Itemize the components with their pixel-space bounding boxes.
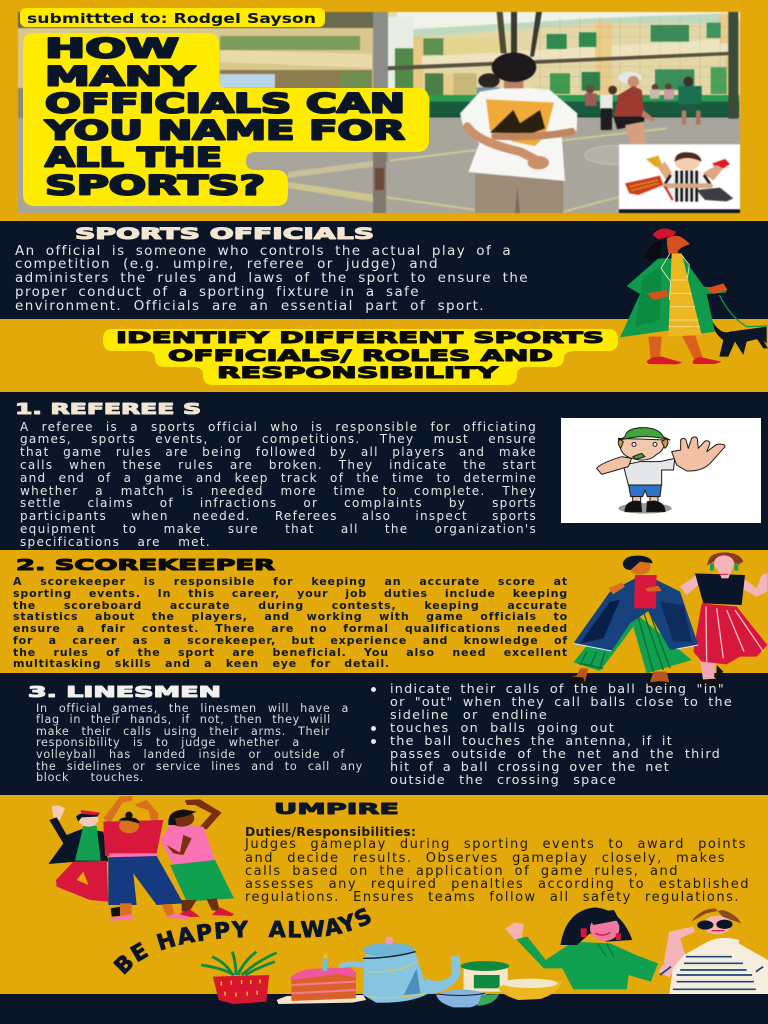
plant [201, 952, 277, 1004]
heading: linesmen: 3. LINESMEN [28, 683, 221, 701]
text: scorekeeper description [13, 575, 568, 670]
text: sports officials definition: environment. Officials are an essential part of sport. [15, 298, 485, 314]
main title: HOW [45, 34, 179, 64]
list: linesmen duties: hit of a ball crossing over the net [390, 760, 670, 775]
text: linesmen description: volleyball has landed inside or outside of [36, 748, 345, 761]
text: sports officials definition: administers the rules and laws of the sport to ensure the [15, 270, 529, 286]
text: sports officials definition: proper conduct of a sporting fixture in a safe [15, 284, 420, 300]
teapot [337, 937, 461, 1003]
panel: bottom band [0, 994, 768, 1024]
main title: OFFICIALS CAN [45, 88, 405, 120]
text: referee description: games, sports events, or competitions. They must ensure [20, 432, 537, 446]
text: linesmen description [36, 702, 363, 784]
list: linesmen duties [371, 682, 733, 788]
heading: referees: 1. REFEREE S [15, 400, 201, 418]
text: umpire duties [244, 825, 750, 905]
bowl [498, 979, 562, 1000]
text: scorekeeper description: statistics about the players, and working with game officials to [13, 610, 568, 623]
text: umpire duties: and decide results. Observes gameplay closely, makes [245, 851, 726, 866]
list: linesmen duties: outside the crossing space [390, 773, 617, 788]
text: referee description: participants when needed. Referees also inspect sports [20, 509, 537, 523]
jar [461, 961, 509, 992]
text: scorekeeper description: the scoreboard accurate during contests, keeping accurate [13, 599, 568, 612]
main title [23, 33, 429, 206]
text: umpire duties: regulations. Ensures teams follow all safety regulations. [245, 890, 740, 905]
list: linesmen duties: passes outside of the net and the third [390, 747, 721, 762]
hero photo of volleyball court [17, 11, 741, 214]
text: referee description: and end of a game and keep track of the time to determine [20, 471, 537, 485]
background people [477, 72, 702, 144]
image: referee blowing whistle [561, 418, 761, 523]
main title: SPORTS? [45, 170, 265, 202]
illustration: two fashion figures [570, 552, 768, 685]
text: referee description: specifications are met. [20, 535, 211, 549]
illustration: table with plant, cake, teapot, bowls [200, 936, 562, 1008]
text: referee description: equipment to make sure that all the organization's [20, 522, 537, 536]
illustration: woman walking dog [620, 228, 768, 364]
text: linesmen description: In official games, the linesmen will have a [36, 702, 349, 715]
submitted-to label [20, 8, 325, 27]
text: linesmen description: the sidelines or service lines and to call any [36, 760, 363, 773]
text: scorekeeper description: multitasking skills and a keen eye for detail. [13, 657, 390, 670]
illustration: three dancing figures [48, 796, 234, 921]
text: umpire duties: Duties/Responsibilities: [245, 825, 416, 839]
heading pill: identify different officials: RESPONSIBILITY [217, 363, 499, 382]
foreground person [460, 53, 577, 213]
text: linesmen description: block touches. [36, 771, 144, 784]
text: scorekeeper description: sporting events. In this career, your job duties include keeping [13, 587, 568, 600]
panel: sports officials band [0, 221, 768, 319]
text: referee description: calls when these rules are broken. They indicate the start [20, 458, 537, 472]
heading pill: identify different officials: OFFICIALS/ ROLES AND [168, 346, 553, 365]
text: referee description: that game rules are being followed by all players and make [20, 445, 537, 459]
text: sports officials definition: competition (e.g. umpire, referee or judge) and [15, 256, 439, 272]
curved slogan: be happy always: BE HAPPY ALWAYS [113, 908, 371, 974]
text: umpire duties: calls based on the application of game rules, and [245, 864, 679, 879]
text: referee description: whether a match is needed more time to complete. They [20, 484, 537, 498]
text: scorekeeper description: ensure a fair contest. There are no formal qualifications needed [13, 622, 568, 635]
heading: scorekeeper: 2. SCOREKEEPER [16, 556, 275, 574]
text: referee description: A referee is a sports official who is responsible for officiating [20, 420, 537, 434]
text: linesmen description: responsibility is to judge whether a [36, 736, 300, 749]
list: linesmen duties: touches on balls going out [390, 721, 615, 736]
text: umpire duties: assesses any required penalties according to established [245, 877, 750, 892]
main title: MANY [45, 62, 196, 92]
text: linesmen description: make their calls using their arms. Their [36, 725, 330, 738]
panel: linesmen band [0, 673, 768, 795]
submitted-to label: submittted to: Rodgel Sayson [27, 12, 316, 27]
list: linesmen duties: the ball touches the antenna, if it [390, 734, 673, 749]
text: sports officials definition: An official is someone who controls the actual play of a [15, 243, 512, 259]
text: linesmen description: flag in their hands, if not, then they will [36, 713, 331, 726]
heading pill: identify different officials [103, 329, 618, 385]
text: referee description: settle claims of infractions or complaints by sports [20, 496, 537, 510]
text: sports officials definition [15, 243, 529, 314]
heading: umpire: UMPIRE [274, 800, 399, 818]
text: referee description [20, 420, 537, 549]
list: linesmen duties: or "out" when they call balls close to the [390, 695, 733, 710]
list: linesmen duties: indicate their calls of the ball being "in" [390, 682, 725, 697]
text: umpire duties: Judges gameplay during sporting events to award points [245, 837, 747, 852]
cup [436, 990, 499, 1007]
panel: referee band [0, 392, 768, 550]
text: scorekeeper description: the rules of the sport are beneficial. You also need excellent [13, 646, 568, 659]
cake [277, 953, 366, 1004]
list: linesmen duties: sideline or endline [390, 708, 548, 723]
main title: ALL THE [45, 142, 222, 174]
text: scorekeeper description: A scorekeeper is responsible for keeping an accurate score at [13, 575, 568, 588]
main title: YOU NAME FOR [43, 116, 405, 146]
text: scorekeeper description: for a career as a scorekeeper, but experience and knowledge of [13, 634, 568, 647]
referee image [619, 144, 740, 214]
illustration: woman in green and man with sunglasses [505, 907, 768, 994]
